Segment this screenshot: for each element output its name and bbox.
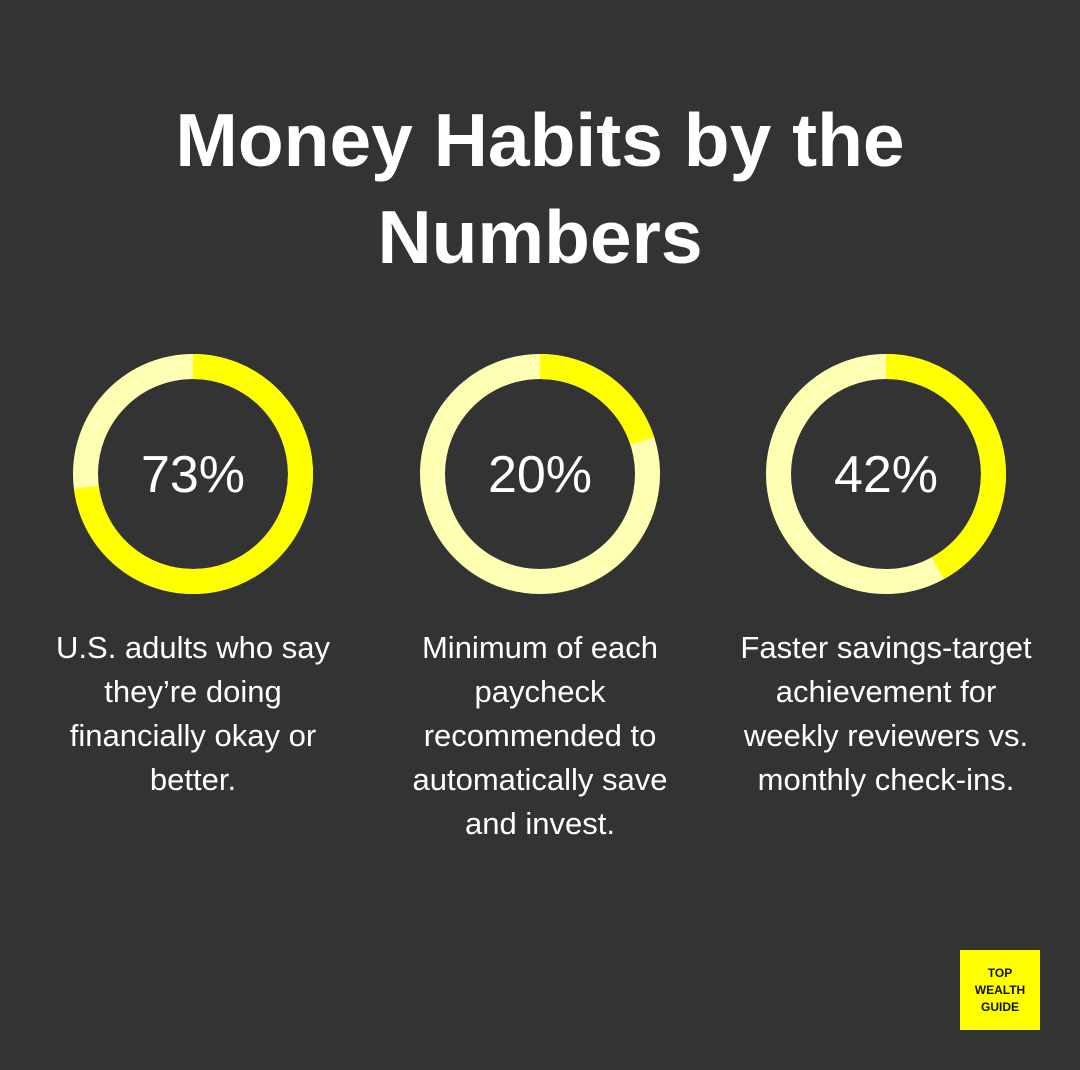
donut: 42%: [766, 354, 1006, 594]
title: Money Habits by the: [175, 98, 905, 182]
description 3: Faster savings-target achievement for weekly reviewers vs. monthly check-ins.: [740, 630, 1032, 797]
logo: [960, 950, 1040, 1030]
donut: 20%: [420, 354, 660, 594]
donut: 42%: 42%: [834, 446, 938, 504]
donut: 73%: [73, 354, 313, 594]
title: Numbers: [377, 195, 703, 279]
logo: WEALTH: [975, 982, 1025, 996]
description 2: Minimum of each paycheck recommended to automatically save and invest.: [412, 630, 668, 841]
logo: TOP: [988, 966, 1012, 980]
title: [175, 98, 905, 279]
logo: GUIDE: [981, 1000, 1019, 1014]
description 1: U.S. adults who say they’re doing financially okay or better.: [56, 630, 330, 797]
donut: 20%: 20%: [488, 446, 592, 504]
donut: 73%: 73%: [141, 446, 245, 504]
